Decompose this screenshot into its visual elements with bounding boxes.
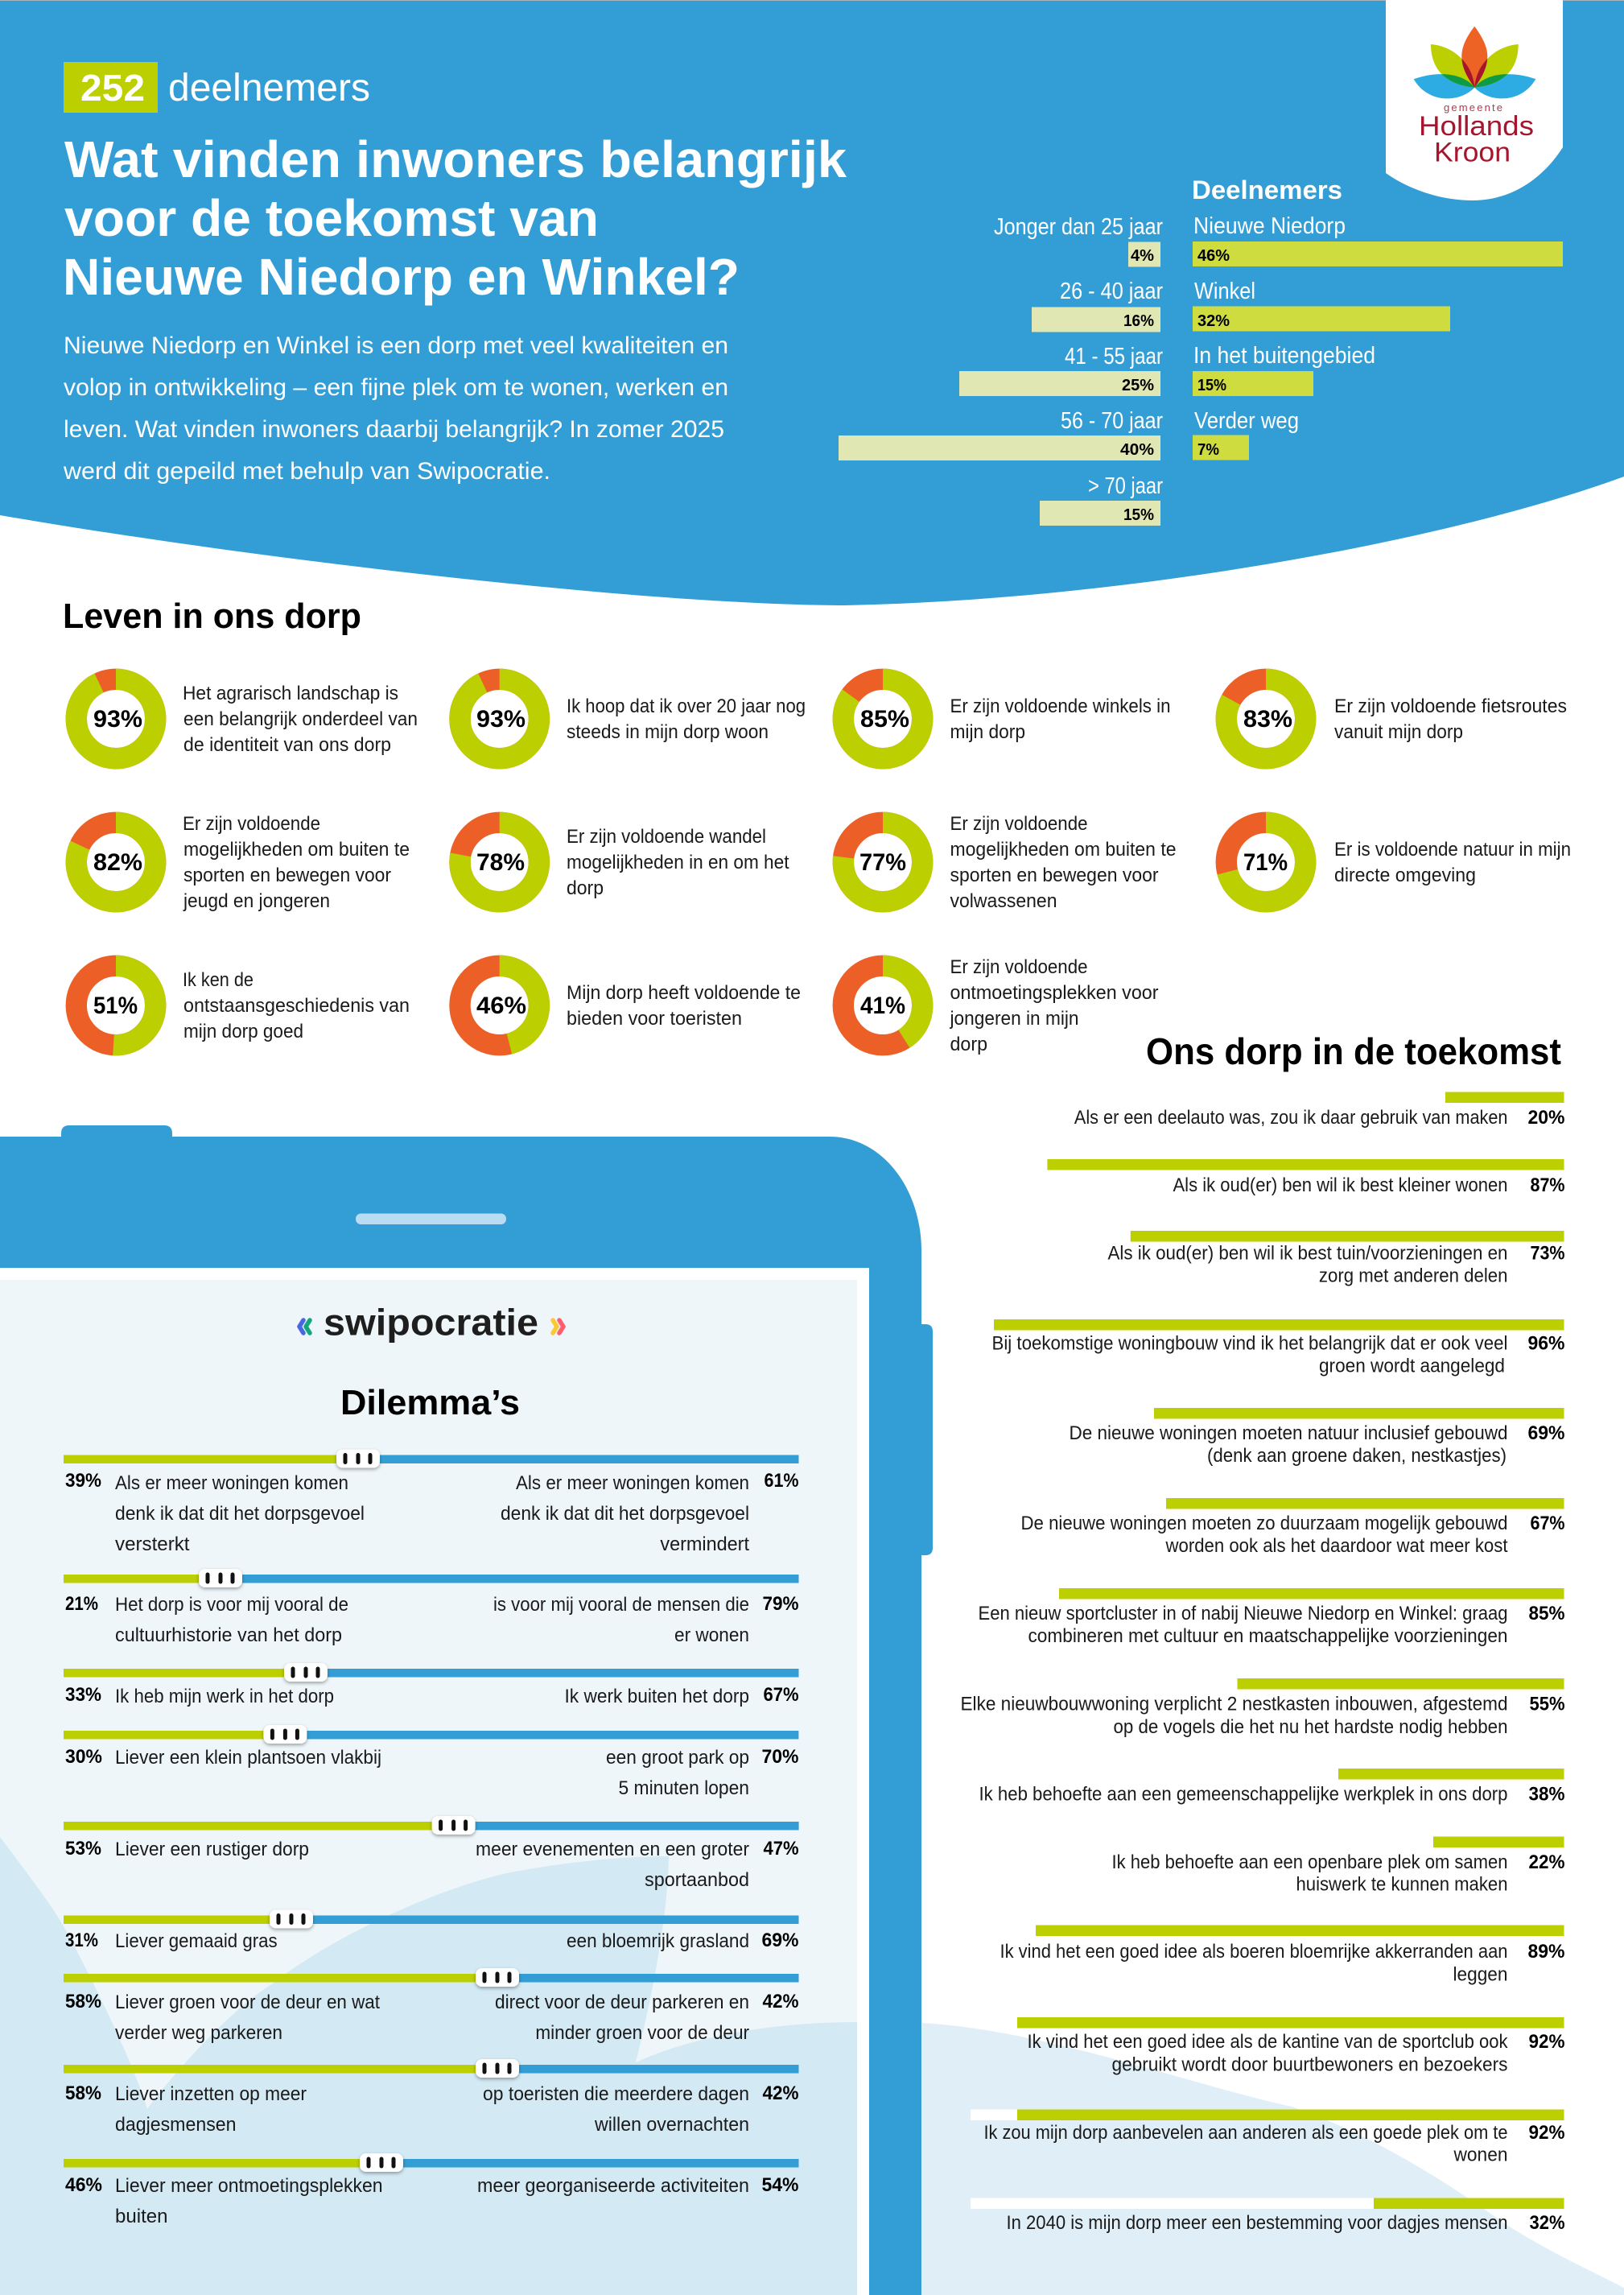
dilemma 8: dagjesmensen: [115, 2114, 237, 2136]
statement 67%: De nieuwe woningen moeten zo duurzaam mogelijk gebouwd: [1020, 1513, 1508, 1534]
statement 73%: zorg met anderen delen: [1319, 1265, 1507, 1286]
dilemma 1: Als er meer woningen komen: [115, 1472, 348, 1494]
item 78% wandel: dorp: [567, 877, 604, 899]
heading: Leven in ons dorp: Leven in ons dorp: [63, 596, 361, 636]
statement 55%: Elke nieuwbouwwoning verplicht 2 nestkasten inbouwen, afgestemd: [961, 1694, 1508, 1715]
statement 67%: 67%: [1531, 1513, 1564, 1534]
statement 69%: 69%: [1527, 1422, 1564, 1444]
statement 73%: Als ik oud(er) ben wil ik best tuin/voorzieningen en: [1107, 1243, 1508, 1264]
dilemma 2: is voor mij vooral de mensen die: [493, 1594, 749, 1616]
dilemma 9: Liever meer ontmoetingsplekken: [115, 2175, 383, 2197]
dilemma 5: [64, 1816, 799, 1891]
item 46% toeristen: [460, 966, 801, 1045]
intro paragraph: leven. Wat vinden inwoners daarbij belangrijk? In zomer 2025: [64, 416, 724, 443]
heading: Ons dorp in de toekomst: Ons dorp in de toekomst: [1146, 1030, 1561, 1072]
item 82% sporten jeugd: Er zijn voldoende: [183, 813, 320, 835]
item 51% ontstaansgeschiedenis: [76, 966, 410, 1045]
bar: 26-40: 16%: [1123, 312, 1154, 330]
item 77% sporten volwassenen: volwassenen: [950, 890, 1057, 912]
dilemma 8: 58%: [65, 2082, 101, 2104]
statement 85%: combineren met cultuur en maatschappelijke voorzieningen: [1028, 1625, 1508, 1647]
item 46% toeristen: Mijn dorp heeft voldoende te: [567, 982, 801, 1004]
statement 87%: 87%: [1531, 1174, 1564, 1196]
logo: swipocratie: swipocratie: [324, 1301, 538, 1343]
dilemma 7: verder weg parkeren: [115, 2022, 282, 2044]
item 51% ontstaansgeschiedenis: ontstaansgeschiedenis van: [183, 995, 410, 1017]
statement 22%: Ik heb behoefte aan een openbare plek om samen: [1112, 1851, 1508, 1873]
item 77% sporten volwassenen: [843, 813, 1177, 912]
item 83% fietsroutes: Er zijn voldoende fietsroutes: [1334, 696, 1567, 717]
dilemma 9: [64, 2153, 798, 2227]
bar: 41-55: [959, 344, 1163, 396]
bar: 26-40: 26 - 40 jaar: [1060, 279, 1163, 304]
dilemma 9: 46%: [65, 2174, 102, 2196]
bar: In het buitengebied: In het buitengebied: [1193, 343, 1375, 369]
statement 96%: Bij toekomstige woningbouw vind ik het belangrijk dat er ook veel: [991, 1333, 1508, 1354]
item 71% natuur: 71%: [1243, 849, 1288, 876]
statement 67%: worden ook als het daardoor wat meer kost: [1165, 1535, 1508, 1557]
intro paragraph: werd dit gepeild met behulp van Swipocratie.: [63, 458, 550, 485]
dilemma 3: [64, 1663, 798, 1707]
item 41% ontmoetingsplekken: 41%: [860, 993, 905, 1019]
item 78% wandel: 78%: [476, 849, 525, 876]
dilemma 5: meer evenementen en een groter: [476, 1839, 749, 1860]
item 93% landschap: 93%: [93, 706, 142, 733]
dilemma 1: Als er meer woningen komen: [516, 1472, 749, 1494]
item 93% over 20 jaar: steeds in mijn dorp woon: [567, 721, 769, 743]
dilemma 2: cultuurhistorie van het dorp: [115, 1624, 342, 1646]
dilemma 8: op toeristen die meerdere dagen: [483, 2083, 749, 2105]
statement 92% kantine: 92%: [1529, 2031, 1564, 2053]
bar: Verder weg: 7%: [1197, 441, 1219, 459]
bar: over 70: > 70 jaar: [1088, 473, 1163, 499]
dilemma 9: 54%: [761, 2174, 798, 2196]
bar: under 25: Jonger dan 25 jaar: [994, 214, 1163, 240]
item 85% winkels: [843, 679, 1170, 758]
title: Nieuwe Niedorp en Winkel?: [63, 248, 740, 306]
item 77% sporten volwassenen: sporten en bewegen voor: [950, 865, 1159, 886]
statement 92% kantine: gebruikt wordt door buurtbewoners en bezoekers: [1112, 2054, 1508, 2075]
statement 38%: [979, 1769, 1564, 1805]
bar: Winkel: Winkel: [1194, 279, 1255, 304]
statement 92% aanbevelen: [971, 2109, 1564, 2165]
dilemma 6: [64, 1909, 798, 1952]
item 93% over 20 jaar: Ik hoop dat ik over 20 jaar nog: [567, 696, 806, 717]
item 85% winkels: Er zijn voldoende winkels in: [950, 696, 1170, 717]
dilemma 7: 58%: [65, 1991, 101, 2012]
statement 87%: [1047, 1159, 1564, 1196]
item 77% sporten volwassenen: mogelijkheden om buiten te: [950, 839, 1177, 861]
dilemma 6: 69%: [761, 1930, 798, 1951]
statement 20%: Als er een deelauto was, zou ik daar gebruik van maken: [1074, 1107, 1507, 1129]
bar: Winkel: [1193, 279, 1450, 332]
item 85% winkels: 85%: [860, 706, 909, 733]
statement 92% aanbevelen: Ik zou mijn dorp aanbevelen aan anderen als een goede plek om te: [983, 2122, 1508, 2144]
statement 22%: [1112, 1837, 1564, 1895]
item 71% natuur: [1226, 823, 1571, 902]
dilemma 5: sportaanbod: [645, 1869, 749, 1891]
statement 32%: 32%: [1529, 2212, 1564, 2234]
title: voor de toekomst van: [64, 189, 599, 247]
item 77% sporten volwassenen: Er zijn voldoende: [950, 813, 1088, 835]
dilemma 4: 30%: [65, 1746, 102, 1768]
statement 89%: 89%: [1527, 1941, 1564, 1963]
statement 85%: 85%: [1529, 1603, 1564, 1624]
dilemma 4: [64, 1725, 798, 1799]
statement 55%: op de vogels die het nu het hardste nodig hebben: [1114, 1716, 1508, 1738]
item 83% fietsroutes: 83%: [1243, 706, 1292, 733]
statement 73%: 73%: [1531, 1243, 1564, 1264]
intro paragraph: volop in ontwikkeling – een fijne plek om te wonen, werken en: [64, 374, 728, 401]
dilemma 1: denk ik dat dit het dorpsgevoel: [115, 1503, 365, 1525]
bar: 56-70: 40%: [1120, 441, 1154, 459]
statement 92% aanbevelen: wonen: [1453, 2144, 1508, 2165]
section: Leven in ons dorp: [63, 596, 1571, 1055]
logo: Hollands Kroon: [1386, 0, 1563, 200]
dilemma 8: [64, 2059, 798, 2136]
phone panel: [0, 1125, 933, 2295]
statement 38%: 38%: [1529, 1784, 1564, 1805]
dilemma 1: denk ik dat dit het dorpsgevoel: [501, 1503, 749, 1525]
item 82% sporten jeugd: [76, 813, 410, 912]
statement 55%: 55%: [1529, 1694, 1564, 1715]
item 51% ontstaansgeschiedenis: Ik ken de: [183, 969, 253, 991]
statement 92% kantine: [971, 2017, 1564, 2075]
statement 69%: De nieuwe woningen moeten natuur inclusief gebouwd: [1069, 1422, 1508, 1444]
statement 32%: In 2040 is mijn dorp meer een bestemming voor dagjes mensen: [1006, 2212, 1508, 2234]
bar: Winkel: 32%: [1197, 312, 1230, 330]
statement 32%: [971, 2198, 1564, 2234]
item 78% wandel: Er zijn voldoende wandel: [567, 826, 766, 848]
statement 89%: leggen: [1453, 1964, 1508, 1985]
bar: In het buitengebied: [1193, 343, 1375, 396]
statement 89%: Ik vind het een goed idee als boeren bloemrijke akkerranden aan: [1000, 1941, 1508, 1963]
dilemma 7: direct voor de deur parkeren en: [495, 1992, 749, 2013]
item 41% ontmoetingsplekken: [843, 956, 1159, 1055]
bar: over 70: 15%: [1123, 506, 1154, 524]
header background: [0, 0, 1624, 605]
dilemma 1: vermindert: [660, 1533, 749, 1555]
bar: 56-70: [839, 408, 1163, 460]
phone speaker: [356, 1214, 506, 1224]
screen wave decoration: [0, 1837, 857, 2295]
bar: In het buitengebied: 15%: [1197, 377, 1226, 394]
statement 67%: [1020, 1498, 1564, 1557]
item 51% ontstaansgeschiedenis: 51%: [93, 993, 138, 1019]
dilemma 9: buiten: [115, 2206, 167, 2227]
statement 38%: Ik heb behoefte aan een gemeenschappelijke werkplek in ons dorp: [979, 1784, 1508, 1805]
dilemma 1: [64, 1449, 798, 1555]
dilemma 4: 70%: [761, 1746, 798, 1768]
logo: Hollands Kroon: Hollands: [1419, 111, 1534, 142]
statement 85%: [979, 1588, 1564, 1647]
item 77% sporten volwassenen: 77%: [859, 849, 906, 876]
statement 85%: Een nieuw sportcluster in of nabij Nieuwe Niedorp en Winkel: graag: [979, 1603, 1508, 1624]
logo: Hollands Kroon: gemeente: [1444, 101, 1502, 114]
dilemma 2: er wonen: [674, 1624, 749, 1646]
item 93% landschap: [76, 679, 418, 758]
statement 20%: [1074, 1092, 1564, 1129]
title: [63, 130, 847, 306]
item 93% landschap: een belangrijk onderdeel van: [183, 708, 418, 730]
dilemma 7: Liever groen voor de deur en wat: [115, 1992, 380, 2013]
item 93% landschap: Het agrarisch landschap is: [183, 683, 398, 704]
dilemma 7: [64, 1968, 798, 2044]
item 83% fietsroutes: vanuit mijn dorp: [1334, 721, 1463, 743]
dilemma 5: 53%: [65, 1838, 101, 1860]
participant count badge: deelnemers: [168, 67, 370, 109]
item 78% wandel: mogelijkheden in en om het: [567, 852, 789, 873]
bar: under 25: [994, 214, 1163, 267]
item 82% sporten jeugd: sporten en bewegen voor: [183, 865, 391, 886]
dilemma 4: Liever een klein plantsoen vlakbij: [115, 1747, 381, 1769]
header panel: [0, 0, 1624, 605]
item 82% sporten jeugd: jeugd en jongeren: [183, 890, 330, 912]
dilemma 3: 67%: [763, 1684, 798, 1706]
item 82% sporten jeugd: mogelijkheden om buiten te: [183, 839, 410, 861]
dilemma 1: versterkt: [115, 1533, 190, 1555]
item 51% ontstaansgeschiedenis: mijn dorp goed: [183, 1021, 303, 1042]
bar: 56-70: 56 - 70 jaar: [1061, 408, 1163, 434]
statement 96%: groen wordt aangelegd: [1319, 1356, 1505, 1377]
dilemma 9: meer georganiseerde activiteiten: [477, 2175, 749, 2197]
statement 69%: (denk aan groene daken, nestkastjes): [1207, 1445, 1507, 1467]
dilemma 2: 21%: [65, 1593, 98, 1615]
intro paragraph: [63, 332, 728, 485]
statement 22%: 22%: [1529, 1851, 1564, 1873]
logo: Hollands Kroon: Kroon: [1434, 137, 1511, 167]
title: Wat vinden inwoners belangrijk: [64, 130, 847, 188]
statement 87%: Als ik oud(er) ben wil ik best kleiner wonen: [1173, 1174, 1508, 1196]
statement 92% aanbevelen: 92%: [1529, 2122, 1564, 2144]
bar: Verder weg: [1193, 408, 1299, 460]
item 93% over 20 jaar: [460, 679, 806, 758]
item 71% natuur: Er is voldoende natuur in mijn: [1334, 839, 1571, 861]
dilemma 4: een groot park op: [606, 1747, 749, 1769]
dilemma 5: Liever een rustiger dorp: [115, 1839, 309, 1860]
bar: over 70: [1040, 473, 1163, 526]
bar: Verder weg: Verder weg: [1194, 408, 1299, 434]
dilemma 7: 42%: [763, 1991, 798, 2012]
item 46% toeristen: bieden voor toeristen: [567, 1008, 742, 1030]
bar: 26-40: [1032, 279, 1163, 332]
statement 96%: 96%: [1527, 1333, 1564, 1354]
item 93% over 20 jaar: 93%: [476, 706, 526, 733]
background shape: bottom right wave: [922, 2023, 1624, 2295]
item 93% landschap: de identiteit van ons dorp: [183, 734, 391, 756]
dilemma 2: Het dorp is voor mij vooral de: [115, 1594, 348, 1616]
statement 22%: huiswerk te kunnen maken: [1296, 1874, 1508, 1895]
dilemma 4: 5 minuten lopen: [618, 1777, 749, 1799]
statement 92% kantine: Ik vind het een goed idee als de kantine van de sportclub ook: [1027, 2031, 1508, 2053]
phone screen: [0, 1268, 869, 2295]
heading: Dilemma's: Dilemma’s: [340, 1383, 520, 1422]
bar: Nieuwe Niedorp: Nieuwe Niedorp: [1193, 213, 1346, 239]
item 41% ontmoetingsplekken: jongeren in mijn: [950, 1008, 1078, 1030]
dilemma 8: Liever inzetten op meer: [115, 2083, 307, 2105]
heading: Deelnemers: Deelnemers: [1192, 175, 1342, 204]
dilemma 3: Ik heb mijn werk in het dorp: [115, 1686, 334, 1707]
statement 96%: [991, 1319, 1564, 1377]
dilemma 2: 79%: [763, 1593, 798, 1615]
dilemma 7: minder groen voor de deur: [535, 2022, 749, 2044]
bar: Nieuwe Niedorp: [1193, 213, 1563, 266]
dilemma 3: Ik werk buiten het dorp: [565, 1686, 749, 1707]
participant count badge: 252: [80, 67, 145, 109]
dilemma 8: 42%: [763, 2082, 798, 2104]
statement 55%: [961, 1678, 1564, 1738]
dilemma 6: een bloemrijk grasland: [567, 1930, 749, 1952]
bar: 41-55: 41 - 55 jaar: [1065, 344, 1163, 369]
statement 20%: 20%: [1527, 1107, 1564, 1129]
dilemma 8: willen overnachten: [594, 2114, 749, 2136]
dilemma 6: Liever gemaaid gras: [115, 1930, 278, 1952]
section: Ons dorp in de toekomst: [961, 1030, 1564, 2234]
dilemma 2: [64, 1569, 798, 1646]
item 71% natuur: directe omgeving: [1334, 865, 1476, 886]
chart: participants by location: [1192, 175, 1563, 460]
item 83% fietsroutes: [1226, 679, 1567, 758]
statement 73%: [1107, 1231, 1564, 1286]
phone body: [0, 1125, 933, 2295]
item 41% ontmoetingsplekken: ontmoetingsplekken voor: [950, 982, 1159, 1004]
item 41% ontmoetingsplekken: Er zijn voldoende: [950, 956, 1088, 978]
participant count badge: [64, 62, 370, 113]
intro paragraph: Nieuwe Niedorp en Winkel is een dorp met veel kwaliteiten en: [64, 332, 728, 359]
dilemma 3: 33%: [65, 1684, 101, 1706]
bar: 41-55: 25%: [1122, 377, 1154, 394]
dilemma 6: 31%: [65, 1930, 98, 1951]
dilemma 1: 39%: [65, 1470, 101, 1492]
dilemma 5: 47%: [763, 1838, 798, 1860]
item 82% sporten jeugd: 82%: [93, 849, 142, 876]
bar: Nieuwe Niedorp: 46%: [1197, 247, 1230, 265]
dilemma 1: 61%: [765, 1470, 798, 1492]
bar: under 25: 4%: [1131, 247, 1154, 265]
chart: age groups: [839, 214, 1163, 526]
item 41% ontmoetingsplekken: dorp: [950, 1034, 987, 1055]
item 46% toeristen: 46%: [476, 993, 526, 1019]
item 85% winkels: mijn dorp: [950, 721, 1025, 743]
statement 89%: [1000, 1926, 1564, 1985]
screen panel: [0, 1280, 857, 2295]
statement 69%: [1069, 1408, 1564, 1467]
item 78% wandel: [460, 823, 789, 902]
